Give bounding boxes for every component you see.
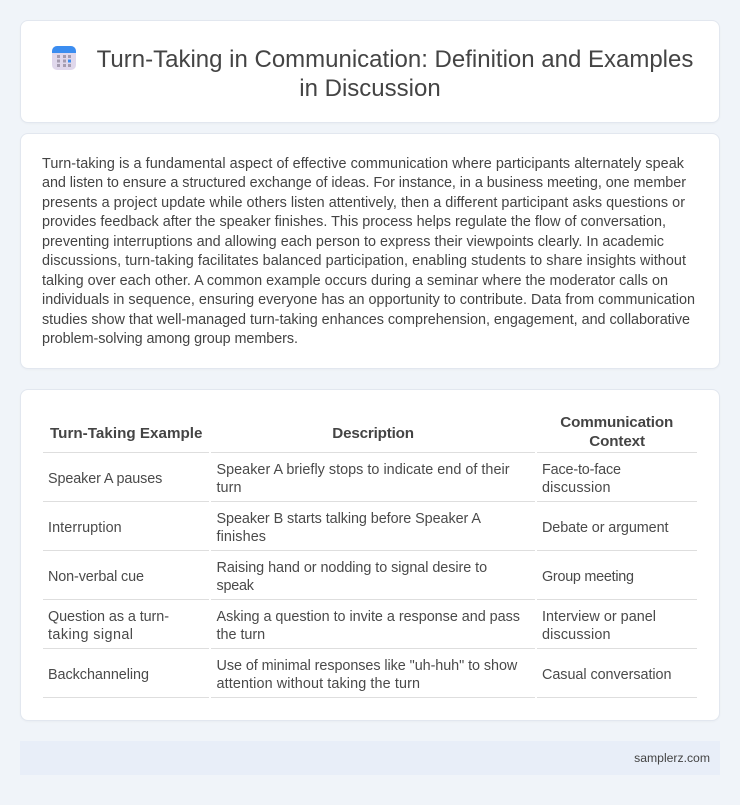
text block: paragraph: provides feedback after the speaker finishes. This process helps regulate the flow of conversation, — [42, 214, 666, 230]
title: in Discussion — [299, 75, 441, 102]
text block: paragraph: Turn-taking is a fundamental aspect of effective communication where participants alternately speak — [42, 156, 685, 172]
row: speaker A pauses: Face-to-face — [542, 462, 621, 478]
footer text: samplerz.com — [634, 751, 710, 765]
row: non-verbal cue: Non-verbal cue — [48, 569, 144, 585]
row: question signal: Interview or panel — [542, 609, 656, 625]
table header: Description — [332, 425, 414, 442]
row: interruption: finishes — [216, 529, 266, 545]
row: question signal: the turn — [216, 627, 265, 643]
table header: Turn-Taking Example — [50, 425, 202, 442]
row: question signal: discussion — [542, 627, 610, 643]
title: Turn-Taking in Communication: Definition and Examples — [97, 46, 693, 73]
row: non-verbal cue: speak — [216, 578, 255, 594]
row: question signal: taking signal — [48, 627, 133, 643]
text block: paragraph: talking over each other. A common example occurs during a seminar where the moderator calls on — [42, 273, 668, 289]
panel: title header — [20, 20, 720, 123]
text block: paragraph: individuals in sequence, ensuring everyone has an opportunity to contribute. Data from communication — [42, 292, 695, 308]
row: non-verbal cue: Raising hand or nodding to signal desire to — [216, 560, 487, 576]
text block: paragraph: and listen to ensure a structured exchange of ideas. For instance, in a business meeting, one member — [42, 175, 686, 191]
panel: intro paragraph — [20, 133, 720, 369]
table header: Communication — [560, 414, 673, 431]
row: non-verbal cue: Group meeting — [542, 569, 634, 585]
row: speaker A pauses — [48, 462, 621, 496]
row: backchanneling: Backchanneling — [48, 667, 149, 683]
row: speaker A pauses: turn — [216, 480, 242, 496]
row: question signal — [48, 609, 656, 643]
row: speaker A pauses: Speaker A pauses — [48, 471, 162, 487]
row: interruption: Debate or argument — [542, 520, 668, 536]
row: question signal: Asking a question to invite a response and pass — [216, 609, 520, 625]
title — [97, 46, 693, 102]
table header: Context — [589, 433, 645, 450]
row: backchanneling: Casual conversation — [542, 667, 672, 683]
row: interruption: Interruption — [48, 520, 122, 536]
table header — [50, 414, 673, 450]
text block: paragraph: studies show that well-managed turn-taking enhances comprehension, engagement, and collaborative — [42, 312, 690, 328]
panel: table card — [20, 389, 720, 721]
row: backchanneling: attention without taking the turn — [216, 676, 420, 692]
footer bar — [20, 741, 720, 775]
text block: paragraph: preventing interruptions and allowing each person to express their viewpoints clearly. In academic — [42, 234, 664, 250]
text block: paragraph: discussions, turn-taking facilitates balanced participation, enabling students to share insights without — [42, 253, 686, 269]
text block: paragraph: presents a project update while others listen attentively, then a different participant asks questions or — [42, 195, 685, 211]
row: speaker A pauses: Speaker A briefly stops to indicate end of their — [216, 462, 510, 478]
text block: paragraph: problem-solving among group members. — [42, 331, 298, 347]
row: non-verbal cue — [48, 560, 634, 594]
row: question signal: Question as a turn- — [48, 609, 169, 625]
table: turn-taking examples — [43, 414, 697, 698]
icon: calendar — [52, 46, 76, 70]
row: interruption — [48, 511, 668, 545]
row: backchanneling — [48, 658, 672, 692]
text block: paragraph — [42, 156, 695, 347]
row: backchanneling: Use of minimal responses like "uh-huh" to show — [216, 658, 518, 674]
row: speaker A pauses: discussion — [542, 480, 610, 496]
row: interruption: Speaker B starts talking before Speaker A — [216, 511, 481, 527]
